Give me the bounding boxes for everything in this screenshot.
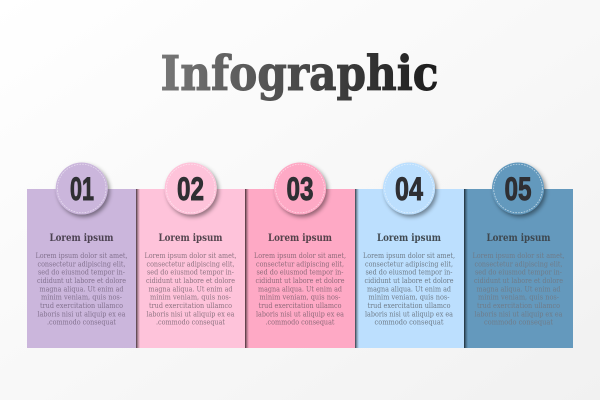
body text 1: .commodo consequat — [47, 318, 116, 327]
body text 5: magna aliqua. Ut enim ad — [476, 284, 561, 293]
body text 2: Lorem ipsum dolor sit amet, — [144, 251, 236, 260]
body text 4: magna aliqua. Ut enim ad — [367, 284, 451, 293]
body text 1: minim veniam, quis nos- — [41, 293, 122, 302]
icon: number badge 04 — [383, 162, 435, 214]
body text 2: magna aliqua. Ut enim ad — [148, 284, 233, 293]
icon: number badge 05: 05 — [504, 171, 532, 207]
body text 5: consectetur adipiscing elit, — [474, 259, 562, 268]
body text 5: cididunt ut labore et dolore — [474, 276, 563, 285]
body text 2: minim veniam, quis nos- — [150, 293, 231, 302]
body text 2: trud exercitation ullamco — [149, 301, 232, 310]
body text 2: cididunt ut labore et dolore — [146, 276, 235, 285]
icon: number badge 04: 04 — [395, 171, 423, 207]
body text 1: consectetur adipiscing elit, — [38, 259, 126, 268]
body text 2 — [144, 251, 236, 327]
heading 5: Lorem ipsum — [486, 232, 550, 244]
body text 2: consectetur adipiscing elit, — [146, 259, 234, 268]
body text 4: laboris nisi ut aliquip ex ea — [365, 309, 453, 318]
icon: number badge 02 — [165, 162, 217, 214]
heading 3: Lorem ipsum — [268, 232, 332, 244]
body text 4: commodo consequat — [374, 318, 444, 327]
body text 1 — [36, 251, 128, 327]
body text 2: laboris nisi ut aliquip ex ea — [146, 309, 235, 318]
panel 5 — [464, 162, 573, 348]
body text 1: Lorem ipsum dolor sit amet, — [36, 251, 128, 260]
body text 4 — [363, 251, 455, 327]
body text 3: sed do eiusmod tempor in- — [256, 268, 344, 277]
body text 4: minim veniam, quis nos- — [368, 293, 450, 302]
body text 3: consectetur adipiscing elit, — [256, 259, 344, 268]
body text 2: sed do eiusmod tempor in- — [147, 268, 234, 277]
body text 5: trud exercitation ullamco — [477, 301, 560, 310]
body text 5: commodo consequat — [484, 318, 553, 327]
body text 5 — [472, 251, 564, 327]
icon: number badge 03: 03 — [286, 171, 314, 207]
panel 1 — [27, 162, 136, 348]
body text 3: Lorem ipsum dolor sit amet, — [254, 251, 346, 260]
body text 3: minim veniam, quis nos- — [260, 293, 341, 302]
body text 1: sed do eiusmod tempor in- — [38, 268, 125, 277]
heading 4: Lorem ipsum — [377, 232, 441, 244]
body text 3: .commodo consequat — [266, 318, 334, 327]
body text 4: sed do eiusmod tempor in- — [366, 268, 453, 277]
body text 3: magna aliqua. Ut enim ad — [258, 284, 342, 293]
icon: number badge 05 — [492, 162, 544, 214]
body text 4: cididunt ut labore et dolore — [364, 276, 454, 285]
body text 4: Lorem ipsum dolor sit amet, — [363, 251, 455, 260]
icon: number badge 02: 02 — [177, 171, 204, 207]
heading 1: Lorem ipsum — [50, 232, 114, 244]
body text 3: trud exercitation ullamco — [258, 301, 342, 310]
body text 5: Lorem ipsum dolor sit amet, — [472, 251, 564, 260]
body text 1: magna aliqua. Ut enim ad — [40, 284, 124, 293]
body text 1: cididunt ut labore et dolore — [37, 276, 126, 285]
panel 2 — [136, 162, 245, 348]
icon: number badge 01 — [56, 162, 108, 214]
body text 3 — [254, 251, 346, 327]
body text 4: consectetur adipiscing elit, — [365, 259, 453, 268]
body text 1: trud exercitation ullamco — [40, 301, 123, 310]
body text 4: trud exercitation ullamco — [368, 301, 451, 310]
heading 2: Lorem ipsum — [158, 232, 222, 244]
body text 2: .commodo consequat — [156, 318, 225, 327]
panel 3 — [245, 162, 355, 348]
icon: number badge 01: 01 — [70, 171, 94, 207]
panel 4 — [355, 162, 464, 348]
icon: number badge 03 — [274, 162, 326, 214]
body text 3: cididunt ut labore et dolore — [256, 276, 345, 285]
body text 1: laboris nisi ut aliquip ex ea — [38, 309, 126, 318]
title: Infographic — [160, 46, 438, 102]
body text 5: sed do eiusmod tempor in- — [475, 268, 562, 277]
body text 3: laboris nisi ut aliquip ex ea — [256, 309, 344, 318]
body text 5: laboris nisi ut aliquip ex ea — [474, 309, 563, 318]
body text 5: minim veniam, quis nos- — [478, 293, 559, 302]
